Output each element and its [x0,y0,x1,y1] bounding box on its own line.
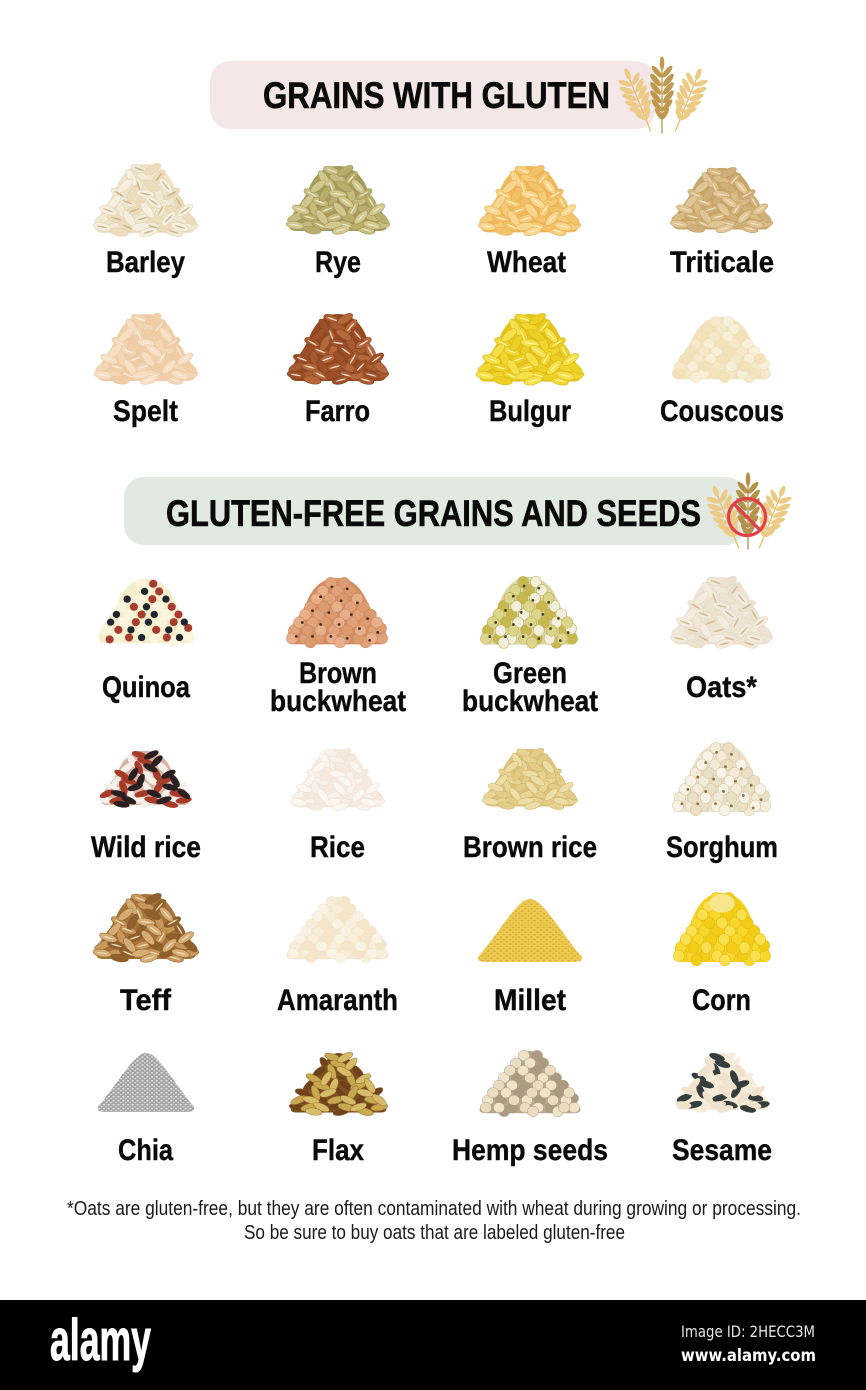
footnote [67,1198,801,1244]
label: oats: Oats* [686,671,757,704]
item: teff [92,891,200,1017]
pile: triticale [669,165,774,234]
item: corn [673,892,771,1017]
label: amaranth: Amaranth [277,984,398,1017]
item: amaranth [277,896,398,1017]
label: brown buckwheat: Brown [299,657,377,690]
section: gluten-free grains and seeds [91,472,798,1167]
pile: farro [287,311,389,386]
label: farro: Farro [305,395,370,428]
label: rye: Rye [315,246,361,279]
pile: flax [289,1050,388,1117]
pile: sorghum [672,742,771,816]
label: bulgur: Bulgur [489,395,571,428]
label: brown rice: Brown rice [463,831,597,864]
item: green buckwheat [462,576,598,718]
pile: bulgur [475,311,585,387]
label: teff: Teff [120,984,172,1017]
label: sesame: Sesame [672,1134,772,1167]
item: rye [285,163,391,279]
pile: sesame [675,1050,770,1114]
pile: hemp seeds [480,1050,580,1117]
pile: chia [98,1053,194,1112]
logo: alamy: alamy [50,1308,151,1373]
label: rice: Rice [310,831,365,864]
icon: crossed-out wheat [700,472,798,554]
pile: green buckwheat [480,576,578,648]
item: millet [478,899,582,1017]
item: wheat [477,163,582,279]
item: flax [289,1050,388,1167]
pile: spelt [93,311,199,386]
pile: wild rice [98,748,192,809]
pile: wheat [477,163,582,237]
label: green buckwheat: buckwheat [462,685,598,718]
label: millet: Millet [494,984,566,1017]
pile: rice [290,746,385,812]
label: triticale: Triticale [670,246,774,279]
pile: quinoa [99,578,195,647]
pile: couscous [672,316,771,383]
label: wheat: Wheat [487,246,566,279]
item: sorghum [666,742,778,864]
icon: wheat ears [612,56,714,137]
label: wild rice: Wild rice [91,831,201,864]
item: bulgur [475,311,585,428]
label: sorghum: Sorghum [666,831,778,864]
item: oats [669,574,774,704]
label: couscous: Couscous [660,395,784,428]
item: couscous [660,316,784,428]
section: grains with gluten [92,56,784,428]
heading pill: gluten-free [124,477,746,545]
pile: amaranth [287,896,388,963]
label: quinoa: Quinoa [102,671,190,704]
item: wild rice [91,748,201,864]
website: www.alamy.com [681,1346,816,1366]
heading pill: grains with gluten [210,61,656,129]
pile: teff [92,891,200,964]
label: green buckwheat: Green [493,657,567,690]
pile: brown rice [482,746,578,811]
item: spelt [93,311,199,428]
pile: millet [478,899,582,962]
pile: oats [669,574,774,650]
heading: grains with gluten: GRAINS WITH GLUTEN [263,75,610,116]
label: spelt: Spelt [113,395,178,428]
pile: rye [285,163,391,236]
item: quinoa [99,578,195,704]
pile: barley [92,161,199,238]
item: farro [287,311,389,428]
pile: brown buckwheat [286,577,388,648]
item: rice [290,746,385,864]
label: corn: Corn [692,984,751,1017]
label: green buckwheat [462,657,598,718]
item: brown buckwheat [270,577,406,718]
label: hemp seeds: Hemp seeds [452,1134,608,1167]
heading: gluten-free grains and seeds: GLUTEN-FREE GRAINS AND SEEDS [166,493,701,534]
label: brown buckwheat [270,657,406,718]
item: sesame [672,1050,772,1167]
footer band [0,1300,866,1390]
item: barley [92,161,199,279]
item: triticale [669,165,774,279]
footnote: So be sure to buy oats that are labeled gluten-free [244,1222,625,1244]
image id: Image ID: 2HECC3M [681,1322,815,1341]
label: barley: Barley [106,246,185,279]
label: brown buckwheat: buckwheat [270,685,406,718]
label: flax: Flax [312,1134,364,1167]
pile: corn [673,892,771,966]
item: hemp seeds [452,1050,608,1167]
item: chia [98,1053,194,1167]
label: chia: Chia [118,1134,173,1167]
item: brown rice [463,746,597,864]
